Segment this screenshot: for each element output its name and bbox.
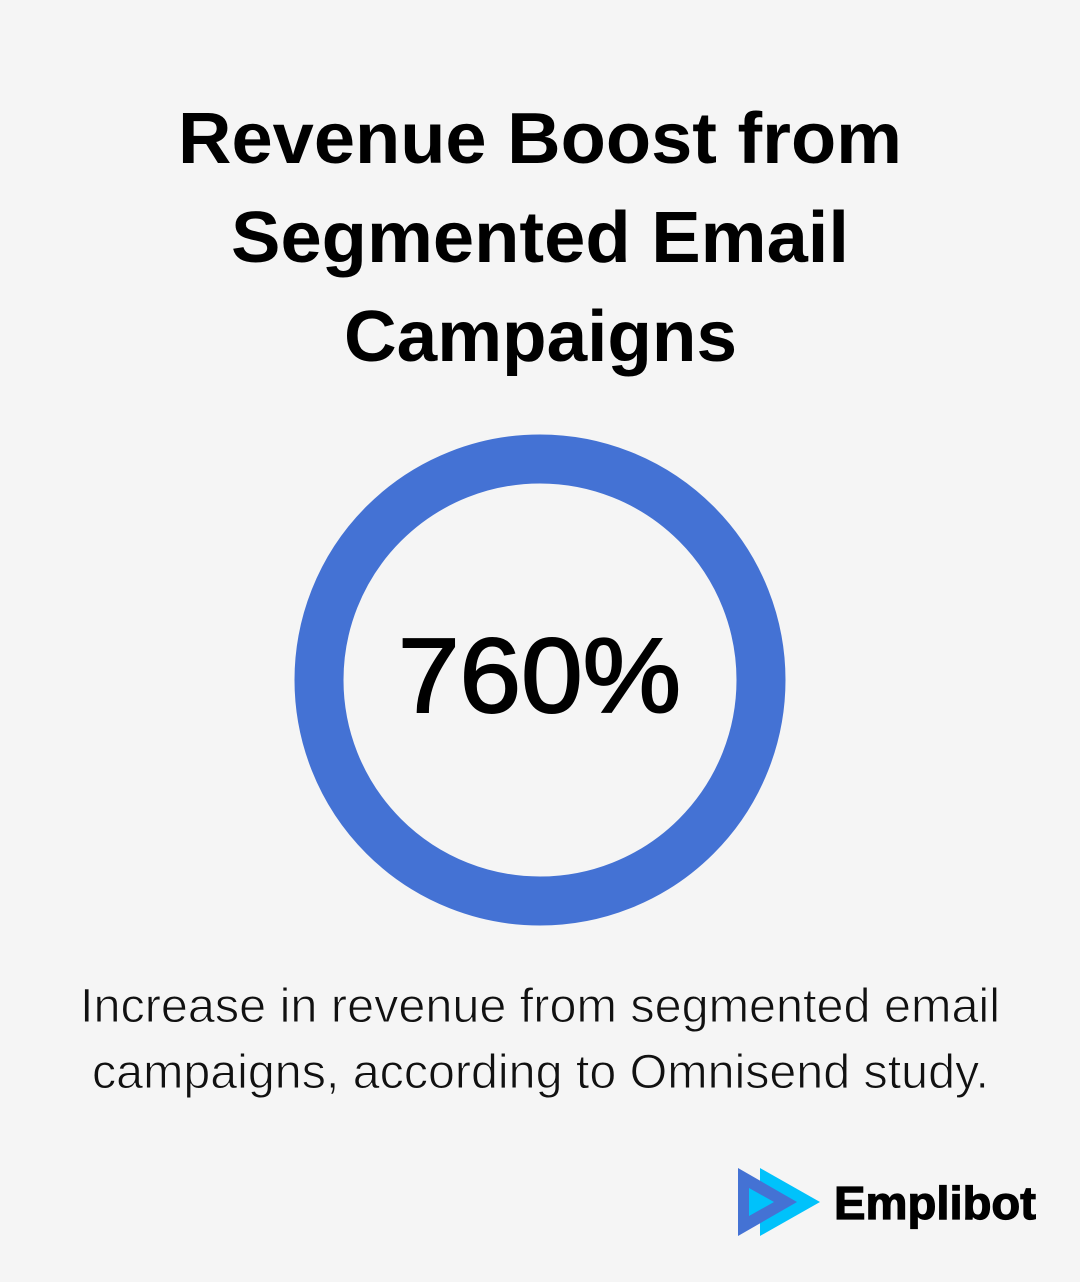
description text: Increase in revenue from segmented email: [80, 980, 1000, 1033]
title: Revenue Boost from: [178, 99, 902, 179]
logo: Emplibot: [738, 1168, 1036, 1236]
title: Segmented Email: [231, 198, 849, 278]
icon: play triangles: [738, 1168, 820, 1236]
wordmark: Emplibot: [834, 1177, 1036, 1229]
description text: [80, 980, 1000, 1099]
title: [178, 99, 902, 377]
donut chart: 760%: [319, 459, 761, 901]
big number: 760%: [398, 617, 681, 735]
description text: campaigns, according to Omnisend study.: [92, 1046, 989, 1099]
title: Campaigns: [344, 297, 737, 377]
